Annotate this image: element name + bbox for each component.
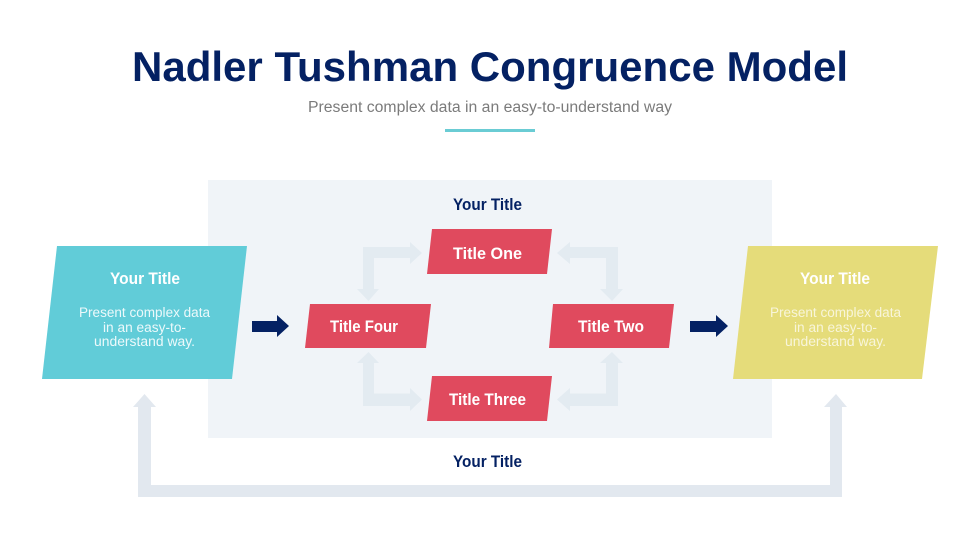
box: title one bbox=[427, 229, 552, 274]
box: title two: Title Two bbox=[578, 318, 644, 336]
title accent line bbox=[445, 129, 535, 132]
box: title four bbox=[305, 304, 431, 348]
panel: input bbox=[42, 246, 247, 379]
arrow: title one and title two bbox=[557, 242, 623, 301]
output heading: Your Title bbox=[800, 270, 870, 288]
panel: organization background bbox=[208, 180, 772, 438]
arrow: title two and title three bbox=[557, 352, 623, 411]
output body text: understand way. bbox=[785, 334, 886, 349]
output body text bbox=[770, 305, 901, 349]
arrow: title four and title one bbox=[357, 242, 422, 301]
subtitle: Present complex data in an easy-to-understand way bbox=[308, 99, 672, 116]
box: title three bbox=[427, 376, 552, 421]
panel heading: Your Title bbox=[453, 196, 522, 214]
box: title four: Title Four bbox=[330, 318, 399, 336]
box: title three: Title Three bbox=[449, 391, 526, 409]
feedback arrow: bottom loop bbox=[133, 394, 847, 497]
arrow: input to panel bbox=[252, 315, 289, 337]
title: Nadler Tushman Congruence Model bbox=[132, 43, 848, 90]
input body text: Present complex data bbox=[79, 305, 210, 320]
panel: output bbox=[733, 246, 938, 379]
input body text: understand way. bbox=[94, 334, 195, 349]
input heading: Your Title bbox=[110, 270, 180, 288]
input body text: in an easy-to- bbox=[103, 320, 186, 335]
feedback label: Your Title bbox=[453, 453, 522, 471]
arrow: title four and title three bbox=[357, 352, 422, 411]
arrow: panel to output bbox=[690, 315, 728, 337]
input body text bbox=[79, 305, 210, 349]
output body text: Present complex data bbox=[770, 305, 901, 320]
box: title one: Title One bbox=[453, 245, 522, 263]
box: title two bbox=[549, 304, 674, 348]
output body text: in an easy-to- bbox=[794, 320, 877, 335]
